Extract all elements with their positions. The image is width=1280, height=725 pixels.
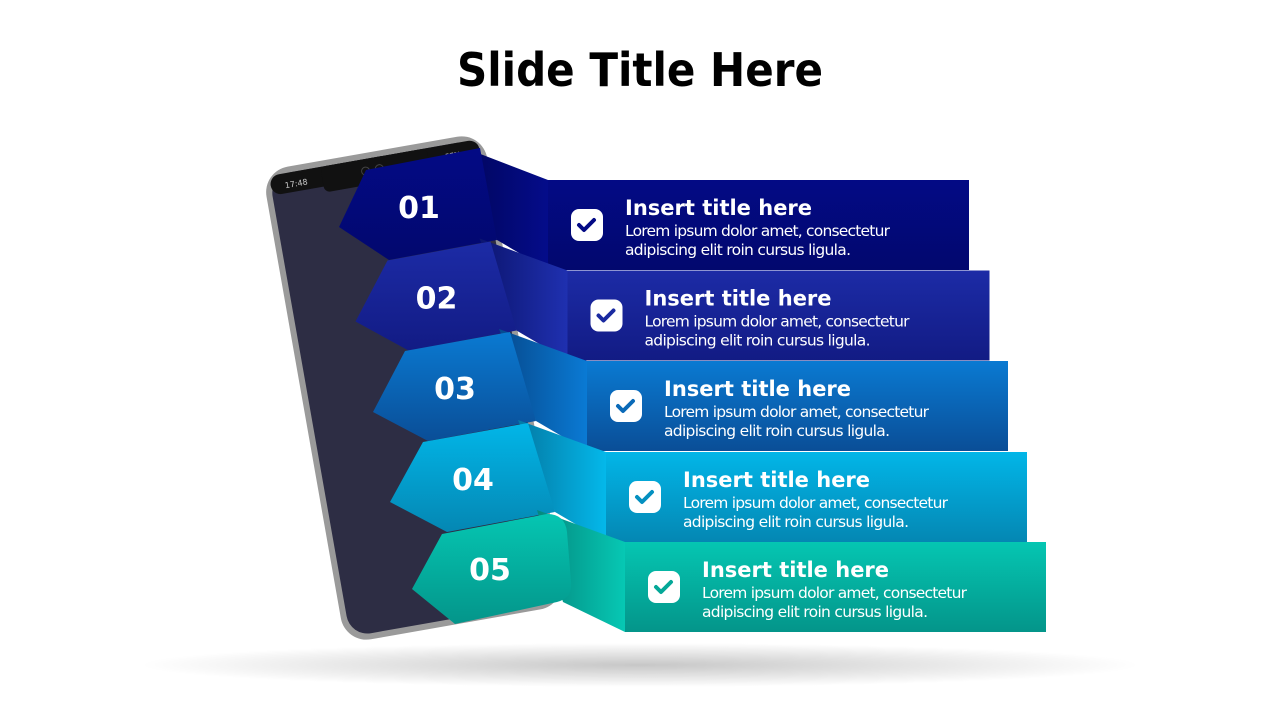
item 04: Lorem ipsum dolor amet, consectetur — [683, 494, 949, 512]
item 03: Insert title here — [664, 377, 851, 401]
item 05: Insert title here — [702, 558, 889, 582]
item 03: adipiscing elit roin cursus ligula. — [664, 422, 890, 440]
item 01: adipiscing elit roin cursus ligula. — [625, 241, 851, 259]
item 04: 04 — [452, 463, 494, 498]
item 02 — [356, 238, 990, 360]
item 05: Lorem ipsum dolor amet, consectetur — [702, 584, 968, 602]
item 04 — [390, 420, 1027, 542]
item 02: Insert title here — [644, 286, 832, 310]
item 01 — [339, 148, 969, 270]
item 04: Insert title here — [683, 468, 870, 492]
item 05 — [412, 510, 1046, 632]
item 01: Lorem ipsum dolor amet, consectetur — [625, 222, 891, 240]
item 03 — [373, 329, 1008, 451]
shadow — [140, 643, 1140, 687]
phone: 57% — [445, 150, 462, 161]
item 02: Lorem ipsum dolor amet, consectetur — [644, 312, 910, 330]
item 02: adipiscing elit roin cursus ligula. — [644, 332, 870, 350]
item 05: 05 — [469, 553, 511, 588]
phone: 17:48 — [284, 177, 308, 190]
item 02: 02 — [416, 282, 457, 316]
phone — [262, 132, 566, 644]
item 03: 03 — [434, 372, 476, 407]
item 05: adipiscing elit roin cursus ligula. — [702, 603, 928, 621]
item 01: 01 — [398, 191, 440, 226]
item 04: adipiscing elit roin cursus ligula. — [683, 513, 909, 531]
item 03: Lorem ipsum dolor amet, consectetur — [664, 403, 930, 421]
title: Slide Title Here — [457, 43, 823, 97]
item 01: Insert title here — [625, 196, 812, 220]
